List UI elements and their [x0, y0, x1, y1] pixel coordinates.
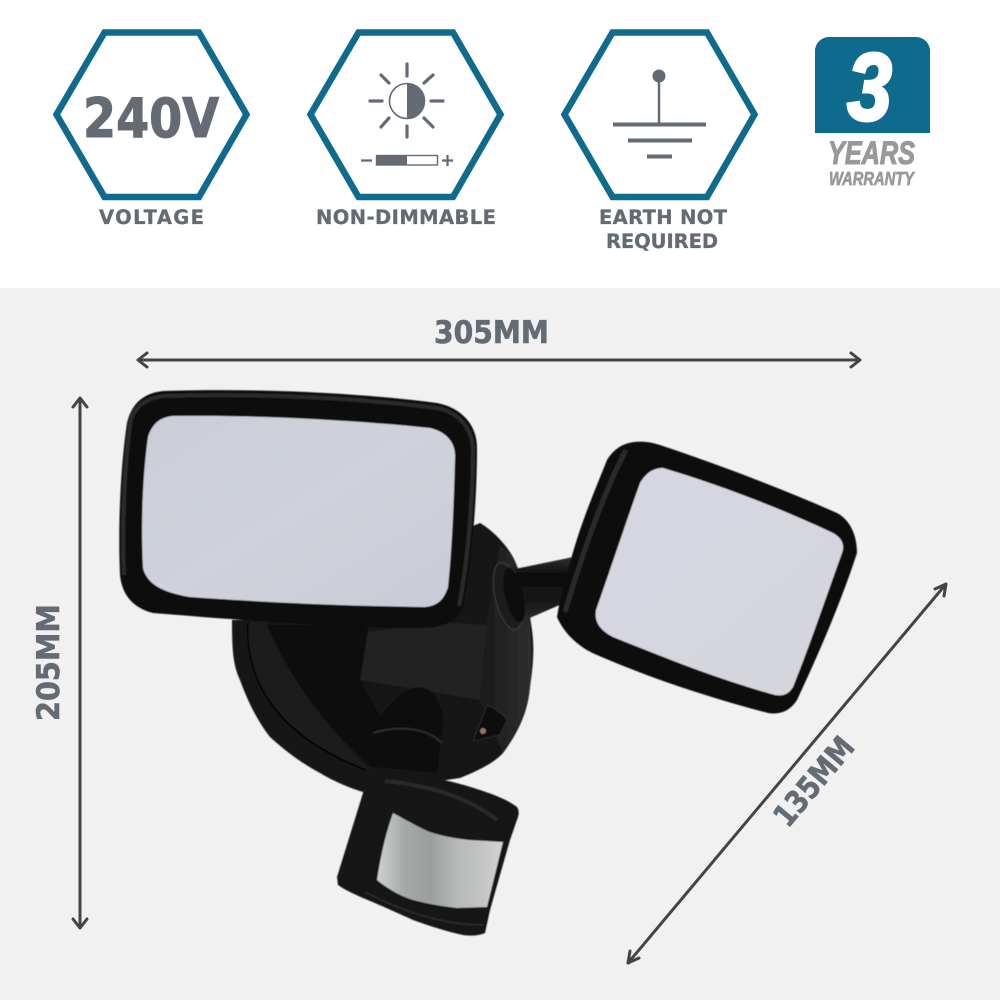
left head lens: [142, 416, 455, 607]
warranty text: WARRANTY: [829, 168, 915, 189]
spec: earth not required: [564, 32, 754, 253]
right head lens: [596, 468, 843, 695]
motion sensor housing: [337, 772, 519, 936]
base right facet: [480, 545, 531, 753]
base raised housing: [360, 622, 487, 700]
arm: [515, 556, 578, 620]
motion sensor neck: [373, 687, 443, 773]
years text: YEARS: [828, 135, 916, 171]
height label: 205MM: [31, 604, 67, 721]
screw: [480, 728, 486, 734]
right lamp head: [557, 442, 857, 713]
arm collar inner ring: [499, 566, 529, 624]
depth arrow: [628, 584, 946, 963]
warranty badge: [815, 34, 930, 189]
earth label line 2: REQUIRED: [606, 230, 718, 253]
badge background: [815, 37, 930, 133]
icon: half sun with brightness bar: [361, 64, 453, 166]
right head bevel: [565, 450, 626, 612]
base rim line: [248, 622, 366, 770]
base lower facet: [360, 680, 500, 772]
wall mount base: [232, 523, 533, 792]
left lamp head: [119, 390, 477, 628]
voltage hexagon: [56, 32, 246, 197]
white header background: [0, 0, 1000, 288]
right head frame: [557, 442, 857, 713]
base rim swoosh: [248, 622, 372, 772]
arm collar: [488, 560, 528, 632]
base recess shadow: [267, 625, 385, 768]
left head bevel: [123, 395, 473, 606]
height arrow: [73, 398, 87, 928]
depth label: 135MM: [767, 730, 862, 834]
voltage value: 240V: [83, 87, 219, 150]
left head frame: [119, 390, 477, 628]
product: twin head security light: [119, 390, 857, 936]
neck ring: [373, 729, 442, 743]
earth hexagon: [564, 32, 754, 197]
depth dimension: [628, 584, 946, 963]
width arrow: [138, 353, 860, 367]
motion sensor top highlight: [385, 781, 497, 820]
non-dimmable hexagon: [310, 32, 500, 197]
width dimension: [138, 315, 860, 367]
motion sensor lens: [377, 813, 503, 908]
voltage label: VOLTAGE: [99, 206, 204, 229]
spec: non-dimmable: [310, 32, 500, 229]
height dimension: [31, 398, 87, 928]
warranty number: 3: [847, 34, 892, 141]
earth label line 1: EARTH NOT: [599, 206, 728, 229]
spec: voltage: [56, 32, 246, 229]
motion sensor lower band: [365, 892, 484, 925]
width label: 305MM: [434, 315, 549, 351]
non-dimmable label: NON-DIMMABLE: [316, 206, 496, 229]
grey dimensions panel: [0, 288, 1000, 1000]
icon: earth symbol: [613, 70, 706, 156]
screw housing: [473, 705, 507, 741]
